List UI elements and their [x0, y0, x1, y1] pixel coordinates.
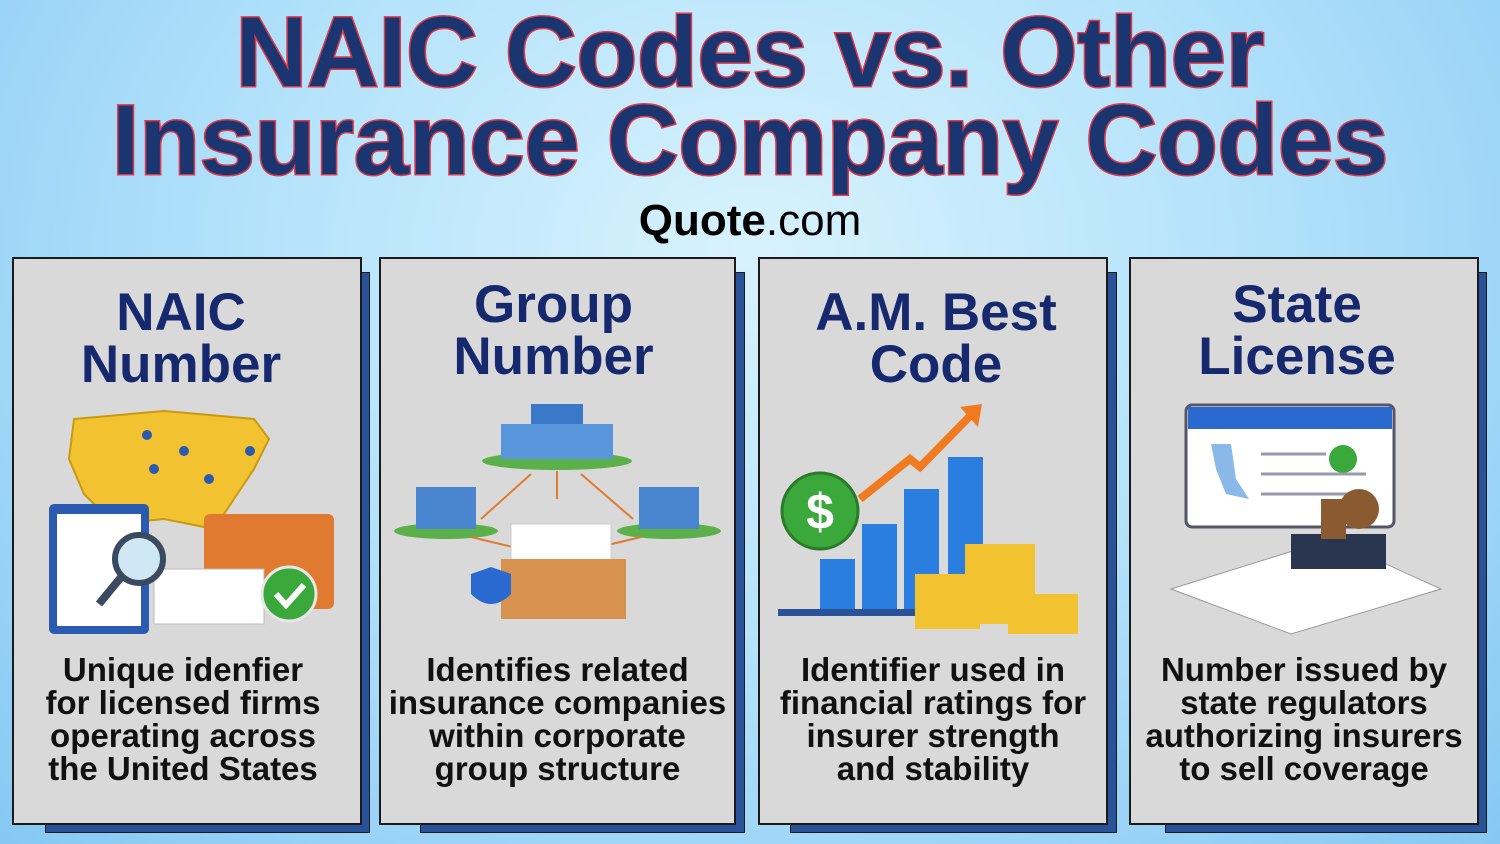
description: insurance companies [389, 684, 726, 721]
description: financial ratings for [780, 684, 1086, 721]
description [389, 651, 726, 787]
heading: State [1232, 275, 1362, 334]
description [1145, 651, 1463, 787]
panel: State License [1129, 257, 1479, 825]
description: the United States [48, 750, 318, 787]
description: authorizing insurers [1145, 717, 1463, 754]
heading: Number [81, 335, 281, 394]
heading: Group [474, 275, 633, 334]
heading: Number [453, 327, 654, 386]
panel: NAIC Number [12, 257, 362, 825]
heading: NAIC [116, 283, 246, 342]
illustration: connected buildings [394, 404, 721, 619]
heading: Code [870, 335, 1002, 394]
panel: Group Number [379, 257, 736, 825]
description: Unique idenfier [63, 651, 303, 688]
illustration: bar chart with coins [778, 404, 1078, 634]
illustration: bar chart with coins: $ [806, 484, 834, 540]
description [780, 651, 1086, 787]
description: within corporate [429, 717, 686, 754]
description: to sell coverage [1179, 750, 1429, 787]
heading [81, 283, 281, 394]
description: and stability [837, 750, 1029, 787]
description: for licensed firms [45, 684, 321, 721]
description: Number issued by [1161, 651, 1447, 688]
title: Insurance Company Codes [112, 84, 1388, 195]
illustration: US map with clipboard and folder [49, 410, 334, 634]
description: operating across [50, 717, 316, 754]
brand: Quote.com: Quote.com [639, 196, 861, 245]
description: insurer strength [806, 717, 1060, 754]
description [45, 651, 321, 787]
heading [1198, 275, 1396, 386]
illustration: license card and stamp [1170, 404, 1442, 634]
panel: A.M. Best Code [758, 257, 1108, 825]
heading [815, 283, 1057, 394]
description: group structure [435, 750, 680, 787]
heading [453, 275, 654, 386]
heading: License [1198, 327, 1396, 386]
title [112, 0, 1388, 196]
description: state regulators [1180, 684, 1428, 721]
description: Identifier used in [801, 651, 1065, 688]
heading: A.M. Best [815, 283, 1057, 342]
description: Identifies related [426, 651, 689, 688]
